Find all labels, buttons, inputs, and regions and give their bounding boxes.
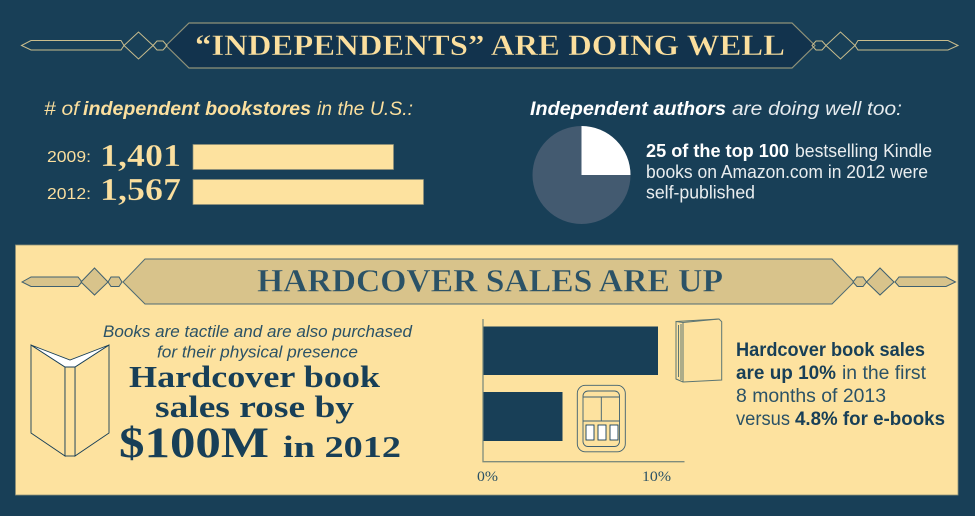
bar: hardcover <box>484 326 658 375</box>
hardcover vs e-books text <box>736 340 945 430</box>
row 2012 <box>47 171 424 207</box>
hardcover vs e-books text: 8 months of 2013 <box>736 386 886 407</box>
authors text: 25 of the top 100 <box>646 141 789 161</box>
hardcover vs e-books text: Hardcover book sales <box>736 340 925 361</box>
panel: independent authors <box>530 99 932 224</box>
authors heading <box>530 99 902 120</box>
authors text: self-published <box>646 182 755 202</box>
top banner <box>22 23 958 68</box>
row 2009: 2009: <box>47 149 91 166</box>
headline stat: sales rose by <box>155 389 355 424</box>
panel: independent bookstores <box>44 99 424 207</box>
pie chart <box>532 126 630 224</box>
authors heading: Independent authors <box>530 99 726 120</box>
row 2009: 1,401 <box>100 137 181 173</box>
hardcover banner <box>22 259 956 304</box>
caption: Books are tactile and are also purchased <box>103 322 413 341</box>
panel background <box>16 245 958 495</box>
authors text <box>646 141 932 202</box>
bar chart <box>477 319 684 485</box>
right ornament <box>853 268 956 295</box>
headline stat: in 2012 <box>283 429 401 464</box>
bookstores heading <box>44 99 413 120</box>
row 2012: 1,567 <box>100 171 181 207</box>
hardcover vs e-books text: 4.8% for e-books <box>795 409 945 430</box>
axis label 0%: 0% <box>477 469 498 485</box>
banner ribbon <box>166 23 815 68</box>
right ornament <box>812 32 958 59</box>
hardcover vs e-books text: are up 10% <box>736 363 836 384</box>
headline stat: Hardcover book <box>129 359 381 394</box>
headline stat <box>119 359 401 467</box>
hardcover vs e-books text: in the first <box>842 363 927 384</box>
axis label 10%: 10% <box>642 469 671 485</box>
panel: hardcover sales <box>16 245 958 495</box>
left ornament <box>22 268 122 295</box>
title: “INDEPENDENTS” ARE DOING WELL <box>195 29 785 62</box>
left ornament <box>22 32 167 59</box>
authors text: books on Amazon.com in 2012 were <box>646 162 928 182</box>
bar: e-books <box>484 392 562 441</box>
heading: HARDCOVER SALES ARE UP <box>257 264 723 300</box>
icon: closed hardcover book <box>676 319 722 382</box>
ribbon <box>123 259 854 304</box>
hardcover vs e-books text: versus <box>736 409 790 430</box>
row 2009 <box>47 137 394 173</box>
caption <box>103 322 413 362</box>
icon: open book <box>31 345 109 456</box>
bookstores heading: in the U.S.: <box>317 99 413 120</box>
axes <box>483 319 684 462</box>
icon: e-reader <box>577 385 625 452</box>
authors text: bestselling Kindle <box>795 141 932 161</box>
bookstores heading: # of <box>44 99 81 120</box>
bookstores heading: independent bookstores <box>83 99 311 120</box>
headline stat: $100M <box>119 420 269 467</box>
caption: for their physical presence <box>157 342 358 362</box>
row 2012: 2012: <box>47 186 91 203</box>
authors heading: are doing well too: <box>732 99 902 120</box>
